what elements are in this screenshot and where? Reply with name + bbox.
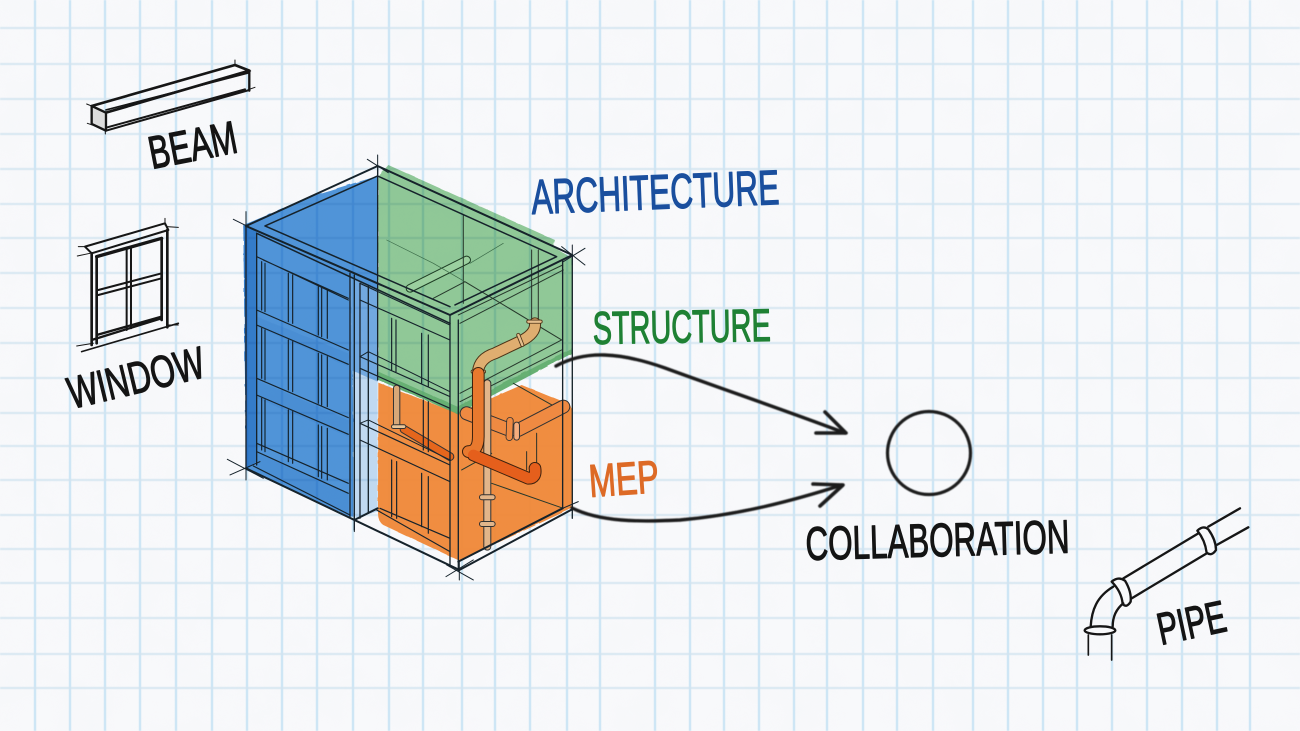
green overlap band xyxy=(378,348,572,414)
building model xyxy=(227,155,585,580)
label: structure: STRUCTURE xyxy=(592,299,771,354)
vertical edges xyxy=(246,226,572,571)
base edges xyxy=(246,468,572,570)
ledges xyxy=(360,352,450,460)
label: MEP: MEP xyxy=(587,450,661,507)
corner crosshairs xyxy=(227,155,585,580)
building frame lines xyxy=(227,155,585,580)
tan upper pipe xyxy=(473,322,541,372)
colour wash: structure green xyxy=(378,165,572,414)
label: architecture: ARCHITECTURE xyxy=(530,161,780,225)
left lower pipe xyxy=(393,388,450,457)
orange cross beam xyxy=(467,407,563,437)
interior lines and pipes xyxy=(387,215,563,547)
label: window: WINDOW xyxy=(62,337,210,419)
label: pipe: PIPE xyxy=(1152,591,1231,655)
colour wash: MEP orange xyxy=(378,383,572,561)
arrow: structure to collaboration xyxy=(556,355,846,433)
right front windows xyxy=(360,283,450,538)
roof inner frame xyxy=(257,176,557,323)
back corner edge xyxy=(376,166,380,380)
label: collaboration: COLLABORATION xyxy=(805,510,1070,570)
orange pipe run xyxy=(468,373,535,478)
icon: beam xyxy=(87,60,255,134)
vertical drain pipe xyxy=(482,383,493,547)
colour wash: architecture blue xyxy=(243,176,378,518)
collaboration circle xyxy=(888,412,970,494)
icon: pipe xyxy=(1085,508,1248,660)
left face windows xyxy=(257,257,348,493)
green beam xyxy=(410,260,467,288)
icon: window xyxy=(77,218,178,352)
roof outline xyxy=(246,166,572,315)
label: beam: BEAM xyxy=(144,111,241,179)
arrow: MEP to collaboration xyxy=(572,484,843,521)
